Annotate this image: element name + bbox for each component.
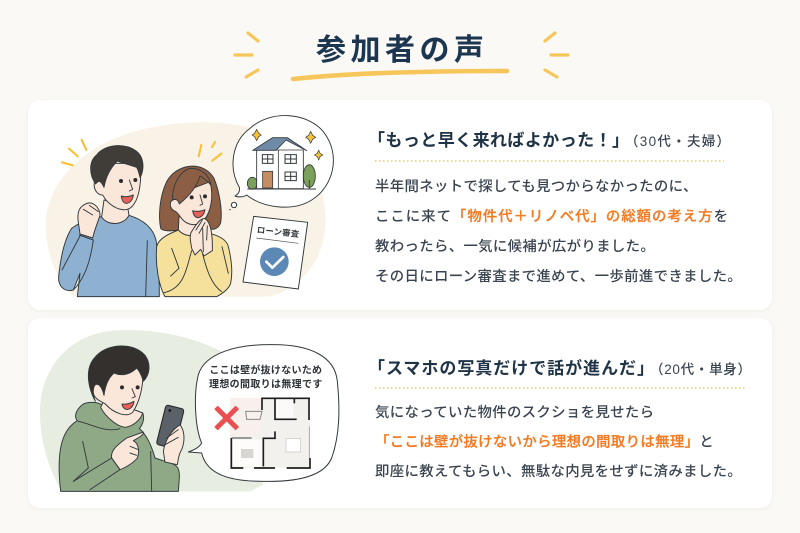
dotted divider 1 [375, 160, 724, 162]
heading 2: 「スマホの写真だけで話が進んだ」 [368, 358, 654, 378]
door [263, 171, 273, 188]
man [59, 146, 159, 297]
man neck [101, 200, 129, 224]
house [257, 150, 303, 189]
thought bubble with house [229, 116, 333, 210]
small bubble [231, 202, 237, 208]
sleeve [73, 458, 120, 490]
woman bangs [173, 168, 211, 204]
title: 参加者の声 [316, 34, 484, 67]
man sweater [59, 215, 159, 297]
card background 2 [28, 318, 772, 508]
body text 1: 半年間ネットで探しても見つからなかったのに、 [375, 178, 698, 195]
testimonial 1 text [368, 131, 742, 285]
man mouth [121, 195, 133, 203]
neck [101, 398, 143, 427]
star sparkles [252, 129, 323, 160]
bubble shape [188, 345, 339, 481]
face [120, 385, 124, 389]
speech bubble with floor plan: 理想の間取りは無理です [209, 377, 322, 390]
woman mouth [193, 210, 205, 218]
beige blob [46, 122, 326, 297]
document sheet [243, 216, 308, 289]
panel: testimonial 2 [28, 318, 772, 508]
holding hand [163, 425, 184, 465]
heading 1 attribute: （30代・夫婦） [625, 134, 730, 149]
green blob [40, 330, 263, 491]
woman sweater [156, 230, 232, 297]
panel: testimonial 1 [28, 100, 772, 310]
man face [94, 163, 141, 210]
woman face [170, 182, 212, 225]
bushes [247, 177, 257, 189]
card background 1 [28, 100, 772, 310]
check badge [260, 247, 289, 276]
hoodie [59, 402, 179, 491]
bubble text: ここは壁が抜けないため [209, 363, 322, 376]
illustration: man with smartphone and floor plan [40, 330, 339, 491]
woman neck [178, 217, 203, 236]
body text 2: 気になっていた物件のスクショを見せたら [375, 404, 654, 421]
body text 1: 教わったら、一気に候補が広がりました。 [375, 237, 655, 255]
speech bubble with floor plan [188, 345, 339, 481]
yellow sparkles near woman [199, 142, 221, 161]
woman eyes, nose [190, 195, 194, 199]
illustration: couple with house and loan document [46, 116, 333, 297]
body text 2: 即座に教えてもらい、無駄な内見をせずに済みました。 [375, 463, 742, 480]
man eyes, nose [119, 179, 123, 183]
body text 2 [375, 404, 742, 480]
man [59, 346, 184, 491]
hair [88, 346, 149, 401]
woman [156, 166, 232, 297]
body text 1 [375, 178, 742, 285]
head [93, 368, 143, 415]
yellow sparkles near man [62, 140, 86, 165]
red cross [216, 407, 237, 429]
windows [262, 155, 296, 181]
man fist [78, 203, 100, 238]
body text 1: ここに来て「物件代＋リノベ代」の総額の考え方を [375, 208, 729, 225]
testimonial 2 text [368, 358, 751, 480]
floor plan [230, 398, 310, 468]
woman hands [190, 219, 212, 256]
body text 1: その日にローン審査まで進めて、一歩前進できました。 [375, 268, 742, 285]
right sparkle lines [545, 33, 568, 77]
title block [235, 33, 568, 79]
phone [156, 405, 184, 449]
bubble shape [233, 116, 333, 207]
man hair [91, 146, 143, 187]
title underline [293, 71, 507, 79]
pointing hand [111, 432, 144, 470]
body text 2: 「ここは壁が抜けないから理想の間取りは無理」と [375, 432, 714, 450]
woman hair back [160, 166, 221, 231]
dotted divider 2 [375, 387, 745, 389]
heading 2 attribute: （20代・単身） [650, 362, 751, 377]
document title: ローン審査 [256, 225, 300, 239]
heading 1: 「もっと早く来ればよかった！」 [368, 131, 629, 150]
left sparkle lines [235, 33, 258, 77]
loan document [243, 216, 308, 289]
